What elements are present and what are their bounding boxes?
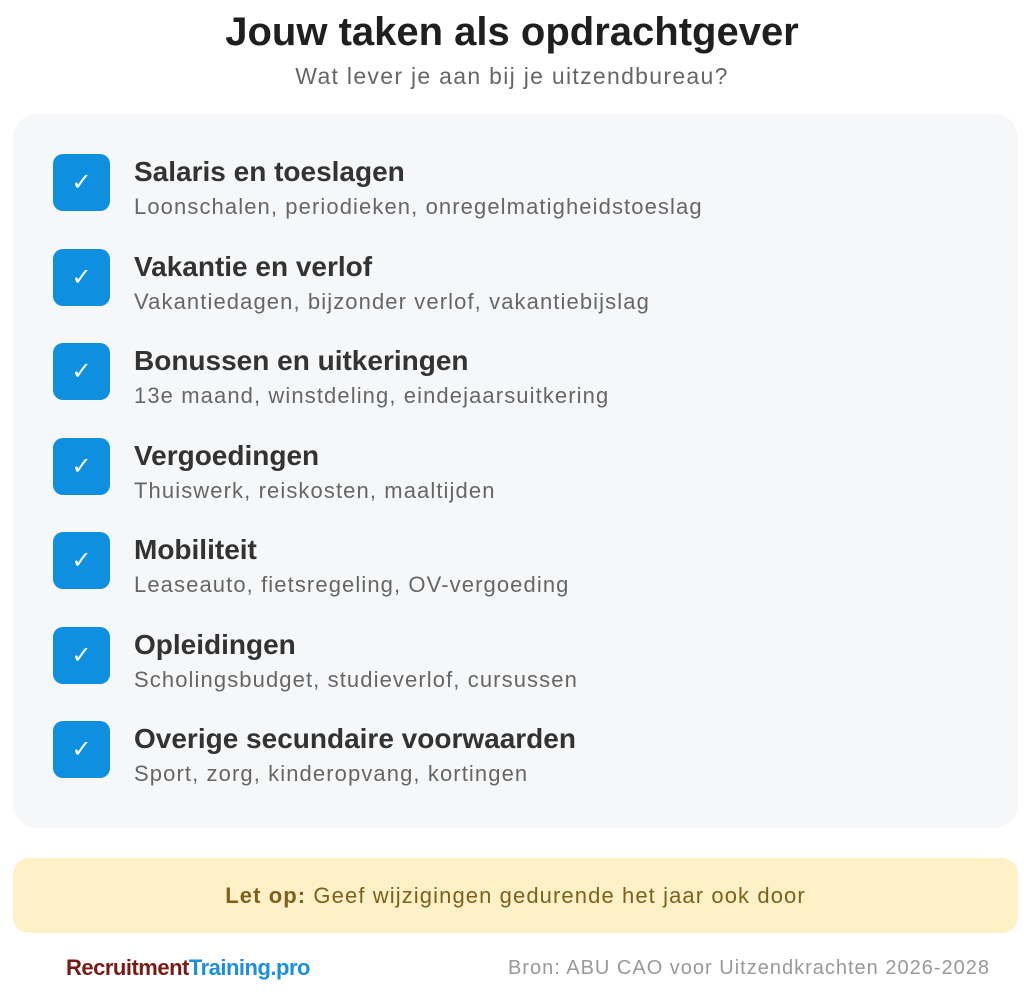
subtitle: Wat lever je aan bij je uitzendbureau? <box>295 63 729 89</box>
item: vakantie: ✓ <box>71 263 92 291</box>
item: opleidingen <box>53 627 578 692</box>
callout: note <box>13 858 1018 933</box>
item: opleidingen: Opleidingen <box>134 629 296 660</box>
item: bonussen: 13e maand, winstdeling, eindejaarsuitkering <box>134 383 609 408</box>
item: mobiliteit <box>53 532 570 597</box>
item: mobiliteit: Leaseauto, fietsregeling, OV-vergoeding <box>134 572 570 597</box>
item: vergoedingen: ✓ <box>71 452 92 480</box>
item: vakantie: Vakantie en verlof <box>134 251 372 282</box>
item: vergoedingen <box>53 438 496 503</box>
item: mobiliteit: ✓ <box>71 546 92 574</box>
source: Bron: ABU CAO voor Uitzendkrachten 2026-2028 <box>508 957 990 979</box>
item: vakantie: Vakantiedagen, bijzonder verlof, vakantiebijslag <box>134 289 650 314</box>
item: salaris: ✓ <box>71 168 92 196</box>
item: salaris <box>53 154 703 219</box>
item: overige: ✓ <box>71 735 92 763</box>
logo: RecruitmentTraining.pro <box>66 955 310 980</box>
item: bonussen <box>53 343 609 408</box>
callout: note: Let op: Geef wijzigingen gedurende het jaar ook door <box>225 883 806 908</box>
title: Jouw taken als opdrachtgever <box>225 10 799 54</box>
item: bonussen: ✓ <box>71 357 92 385</box>
item: overige: Sport, zorg, kinderopvang, kortingen <box>134 761 528 786</box>
item: vakantie <box>53 249 650 314</box>
item: salaris: Salaris en toeslagen <box>134 156 405 187</box>
item: opleidingen: Scholingsbudget, studieverlof, cursussen <box>134 667 578 692</box>
item: overige: Overige secundaire voorwaarden <box>134 723 576 754</box>
item: bonussen: Bonussen en uitkeringen <box>134 345 468 376</box>
item: mobiliteit: Mobiliteit <box>134 534 257 565</box>
item: vergoedingen: Thuiswerk, reiskosten, maaltijden <box>134 478 496 503</box>
panel: checklist <box>13 114 1018 828</box>
item: vergoedingen: Vergoedingen <box>134 440 319 471</box>
item: overige <box>53 721 576 786</box>
item: opleidingen: ✓ <box>71 641 92 669</box>
item: salaris: Loonschalen, periodieken, onregelmatigheidstoeslag <box>134 194 703 219</box>
